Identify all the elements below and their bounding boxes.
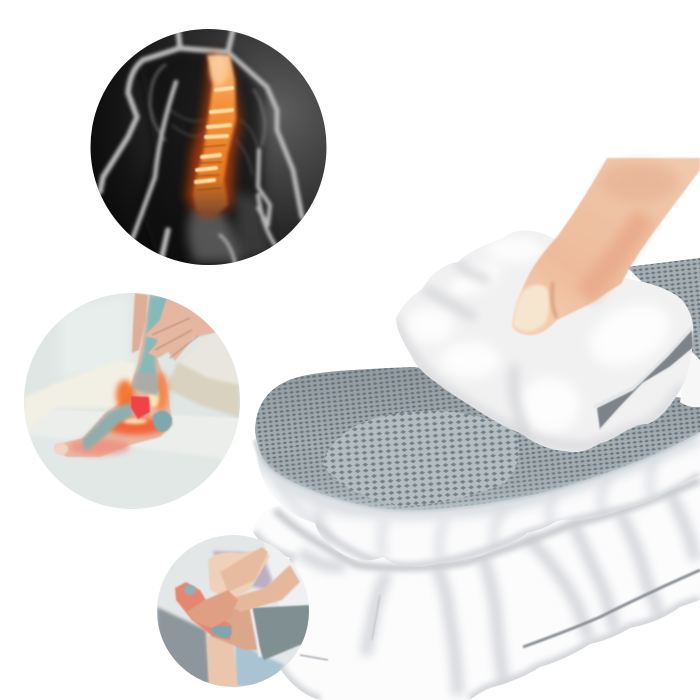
torso shading — [140, 48, 270, 265]
sole of foot — [175, 582, 232, 640]
insole mesh top — [255, 367, 700, 510]
circle: foot sole pain — [157, 535, 312, 687]
finger pressing the insole — [512, 158, 700, 335]
raised knee — [208, 550, 270, 600]
edge shading — [253, 532, 700, 700]
toes — [54, 443, 68, 455]
bed — [28, 410, 238, 460]
blanket grey — [157, 607, 210, 687]
lobe creases — [300, 493, 695, 695]
foam lobe right of fold — [680, 352, 700, 407]
fold highlights — [406, 238, 680, 433]
white pillow — [24, 362, 134, 410]
blue blanket — [235, 640, 285, 687]
spine — [193, 55, 236, 215]
shorts — [252, 605, 312, 660]
leg and foot — [54, 295, 173, 457]
vertebrae — [196, 88, 232, 182]
pain glow — [106, 417, 166, 435]
lower leg — [207, 635, 238, 687]
white background right — [264, 542, 308, 606]
beige trousers — [165, 345, 240, 418]
purple cushion — [212, 551, 272, 590]
pelvis haze — [188, 203, 240, 262]
hand on sole — [187, 590, 238, 628]
fingernail — [513, 285, 549, 331]
rear mesh behind fold — [627, 258, 700, 362]
blue-grey heel and mid-foot bones — [153, 411, 172, 432]
blue-grey shin bone — [133, 295, 170, 395]
bright wall highlight — [67, 303, 123, 372]
thigh underside — [210, 608, 258, 650]
red joint — [131, 396, 150, 419]
upper insole foam — [256, 432, 700, 566]
fold shading — [396, 262, 683, 446]
grey middle stripe — [523, 570, 700, 647]
spine glow — [186, 50, 240, 218]
circle: ankle pain — [24, 293, 240, 509]
circle: glowing spine x-ray — [90, 29, 327, 268]
grey underside strip — [597, 330, 693, 430]
hand — [132, 293, 217, 361]
heel cup — [322, 411, 519, 506]
body outlines — [100, 30, 302, 268]
folded insole front — [396, 230, 693, 452]
lower insole foam — [253, 476, 700, 700]
upper arm — [220, 547, 268, 592]
shadow under upper foam — [275, 480, 700, 568]
